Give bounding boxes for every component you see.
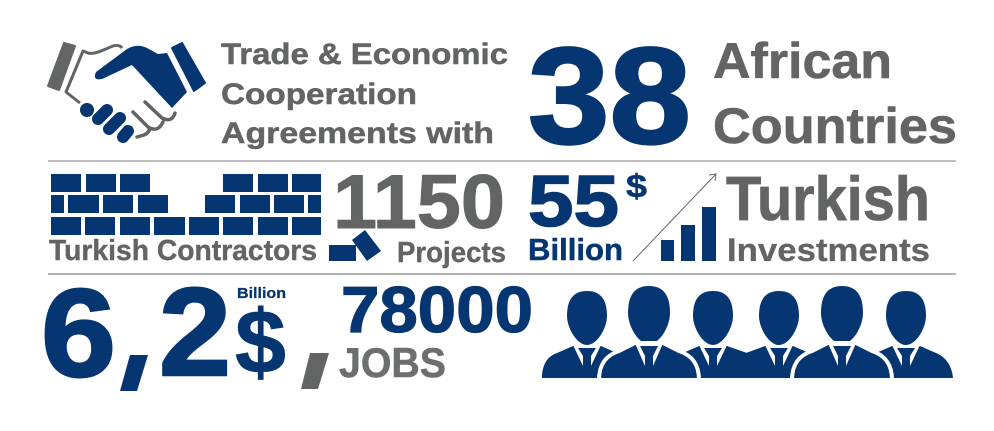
person 2 [599, 286, 699, 380]
number: 6,2: 2 [159, 263, 231, 402]
person 5 [792, 286, 892, 380]
person 4 [734, 291, 824, 378]
grey comma [301, 353, 329, 389]
icon: handshake [48, 43, 205, 137]
text: Projects: Projects [397, 237, 506, 269]
person 6 [859, 291, 953, 378]
text: Turkish Contractors: Turkish Contractors [49, 235, 317, 267]
text: JOBS: JOBS [339, 339, 446, 386]
person 1 [542, 291, 632, 378]
icon: rising bar chart with arrow [633, 174, 716, 261]
icon: loose bricks [329, 230, 381, 261]
text: African Countries: Countries [713, 98, 957, 154]
number: 1150: 1150 [333, 160, 505, 245]
icon: brick wall [51, 174, 321, 235]
text: Turkish Investments: Investments [727, 232, 930, 268]
text: African Countries: African [713, 33, 892, 89]
number: 6,2 [41, 263, 231, 403]
text: African Countries [713, 33, 957, 154]
text: Turkish Investments: Turkish [726, 165, 930, 234]
text: trade and economic cooperation agreements [221, 38, 508, 150]
number: 55: 55 [528, 162, 619, 242]
number: 78000: 78000 [341, 273, 533, 346]
number: 38: 38 [528, 20, 691, 173]
symbol: dollar: $ [626, 168, 647, 204]
text: trade and economic cooperation agreements: Trade & Economic [221, 38, 508, 71]
icon: row of business people [542, 286, 953, 380]
text: trade and economic cooperation agreements: Cooperation [221, 78, 417, 111]
text: small Billion: Billion [237, 285, 286, 302]
text: trade and economic cooperation agreements: Agreements with [221, 117, 494, 150]
text: Turkish Investments [726, 165, 930, 268]
person 3 [668, 291, 758, 378]
symbol: large dollar: $ [235, 293, 286, 393]
number: 6,2: 6 [41, 264, 116, 403]
text: Billion: Billion [528, 232, 623, 267]
